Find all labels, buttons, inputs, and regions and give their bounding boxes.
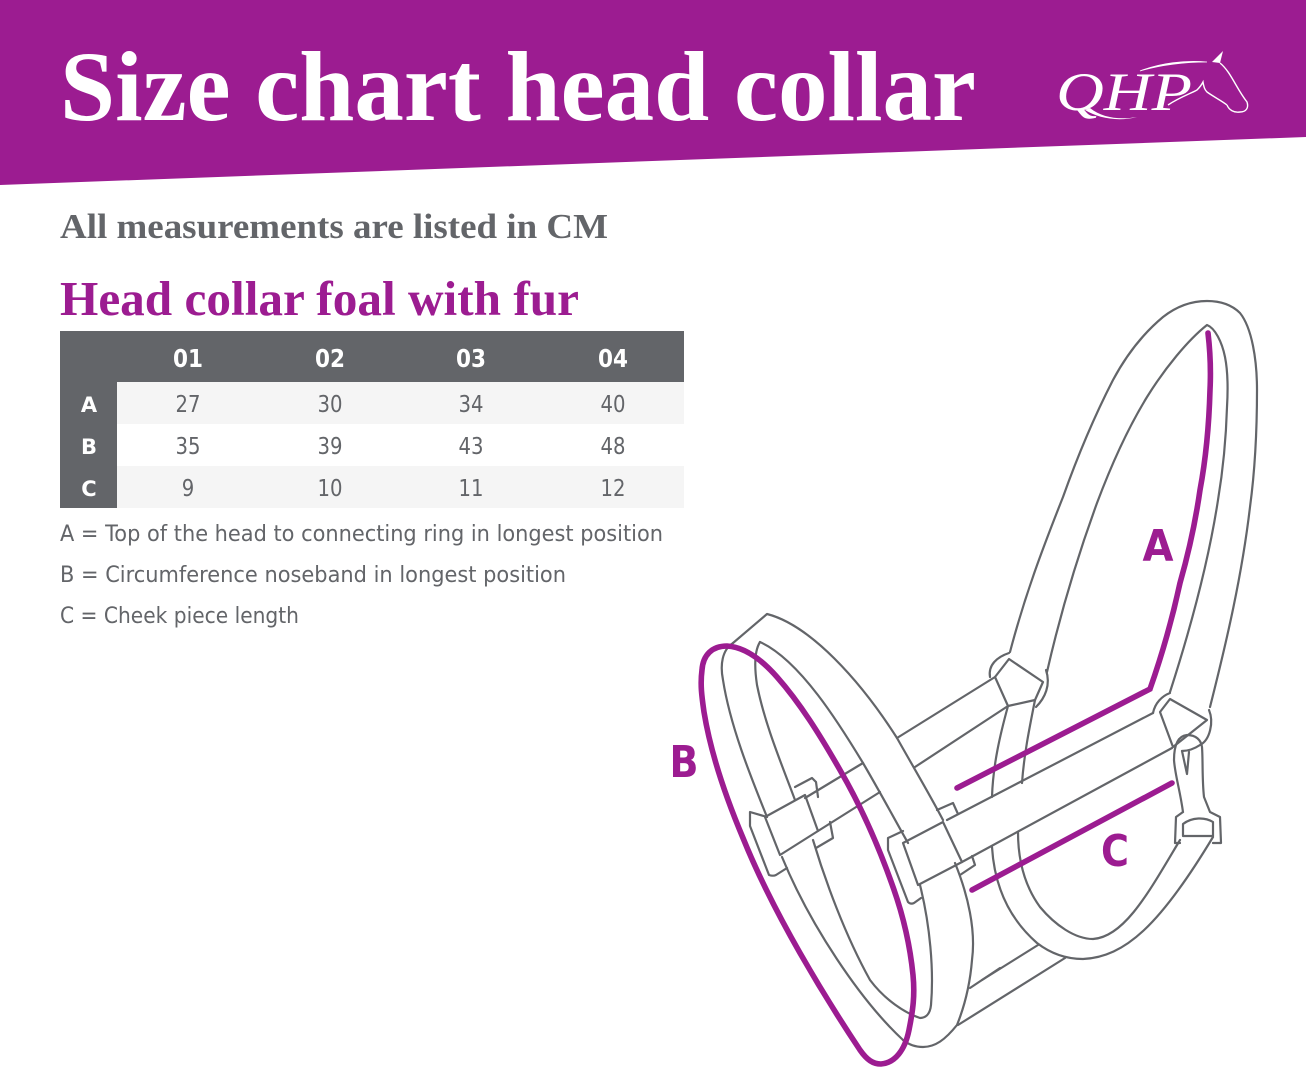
row C: 11 bbox=[458, 476, 484, 502]
row A: 34 bbox=[458, 392, 484, 418]
size table bbox=[60, 331, 684, 508]
right ring and clip bbox=[1153, 693, 1221, 843]
right buckle bbox=[888, 803, 975, 904]
legend notes: B = Circumference noseband in longest position bbox=[60, 563, 566, 588]
crown strap bbox=[1010, 301, 1257, 707]
row C: 10 bbox=[318, 476, 342, 502]
measure line A bbox=[957, 333, 1210, 788]
section heading: Head collar foal with fur bbox=[60, 271, 579, 326]
label A: A bbox=[1142, 521, 1174, 572]
row C: 12 bbox=[600, 476, 626, 502]
label C: C bbox=[1101, 826, 1129, 877]
measure line C bbox=[972, 783, 1172, 890]
legend notes: C = Cheek piece length bbox=[60, 604, 299, 629]
label B: B bbox=[670, 737, 698, 788]
throat loop bbox=[958, 832, 1213, 1025]
logo: QHP horse bbox=[1056, 51, 1248, 122]
row A bbox=[81, 392, 626, 418]
row C bbox=[81, 476, 626, 502]
noseband outer bbox=[722, 614, 1000, 1047]
header banner bbox=[0, 0, 1306, 185]
row A: 40 bbox=[600, 392, 626, 418]
row C: C bbox=[81, 477, 97, 501]
table header row bbox=[173, 344, 628, 373]
table header row: 04 bbox=[598, 344, 628, 373]
lower strap bbox=[947, 713, 1172, 862]
row A: 30 bbox=[318, 392, 342, 418]
table header row: 01 bbox=[173, 344, 203, 373]
head collar diagram bbox=[670, 301, 1257, 1064]
row B: 43 bbox=[458, 434, 484, 460]
row B bbox=[81, 434, 626, 460]
upper cross straps bbox=[897, 677, 1008, 767]
left buckle bbox=[750, 763, 880, 876]
legend notes bbox=[60, 522, 663, 629]
row A: A bbox=[81, 393, 98, 417]
row B: 48 bbox=[600, 434, 626, 460]
measure line B bbox=[701, 646, 914, 1064]
title: Size chart head collar bbox=[60, 31, 976, 142]
row C: 9 bbox=[182, 476, 194, 502]
table header row: 03 bbox=[456, 344, 486, 373]
row B: 39 bbox=[318, 434, 342, 460]
table header row: 02 bbox=[315, 344, 345, 373]
legend notes: A = Top of the head to connecting ring in longest position bbox=[60, 522, 663, 547]
row B: B bbox=[81, 435, 97, 459]
logo: QHP horse: QHP bbox=[1056, 62, 1192, 122]
row B: 35 bbox=[176, 434, 200, 460]
subheading: measurements note: All measurements are listed in CM bbox=[60, 207, 608, 246]
left cheek joint bbox=[990, 653, 1048, 797]
row A: 27 bbox=[176, 392, 200, 418]
